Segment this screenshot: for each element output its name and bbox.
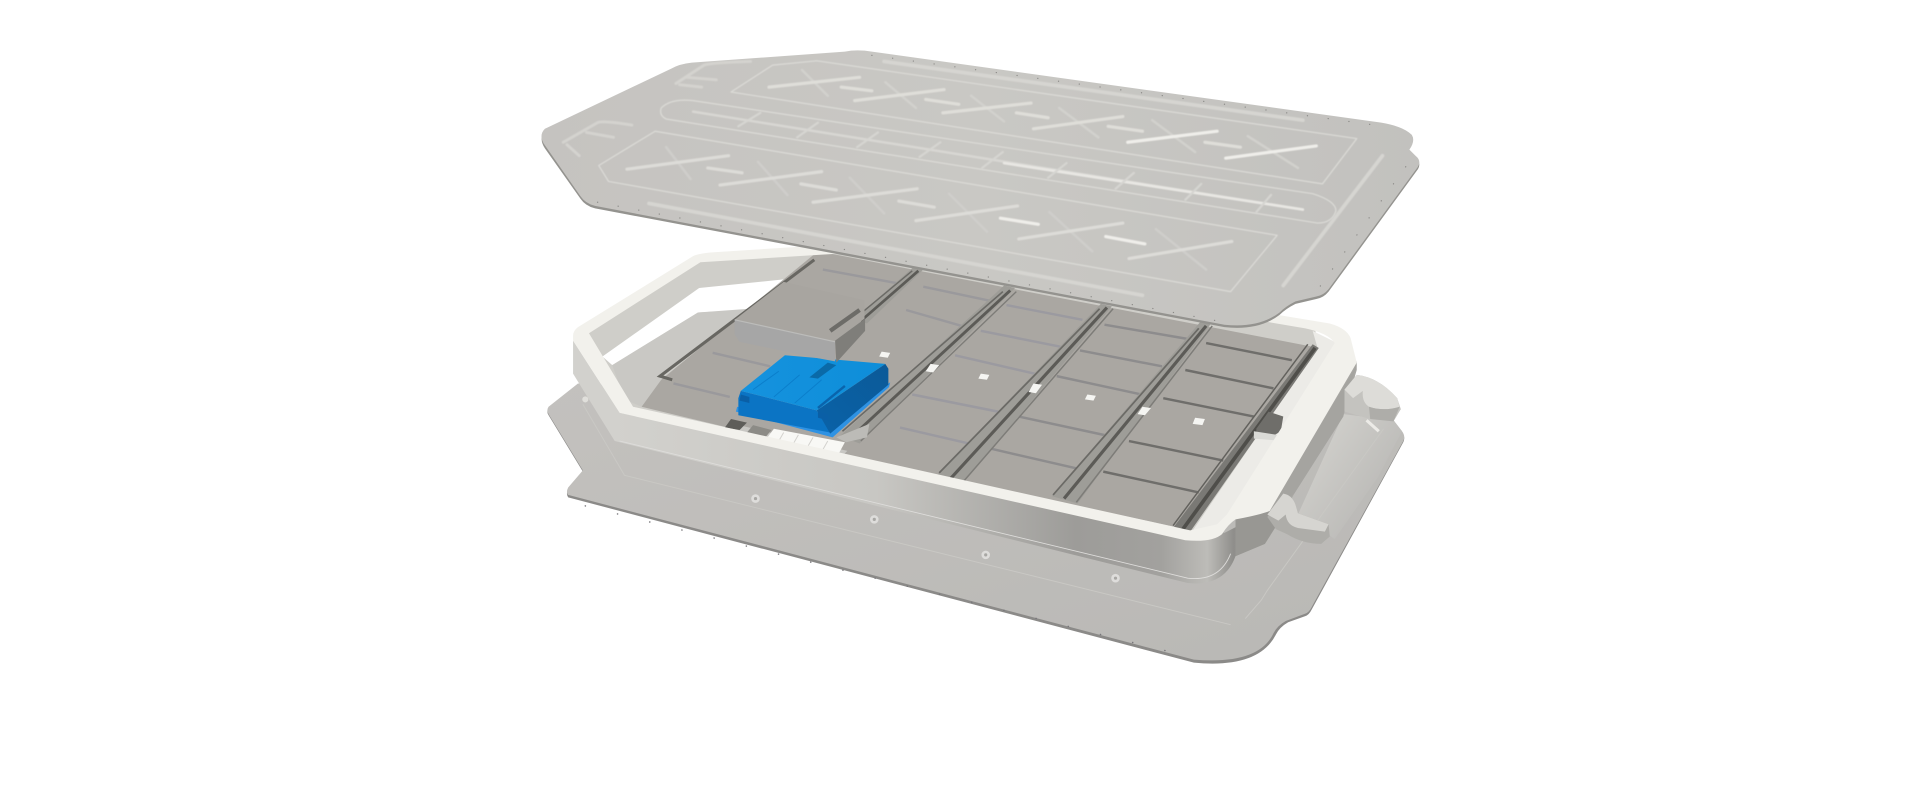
- blue top rib: [818, 386, 845, 408]
- lid edge shadow: [542, 135, 1419, 328]
- divider 4: [1052, 322, 1211, 503]
- tray rim: [573, 244, 1357, 541]
- lid lower panel x-ribs: [627, 147, 1232, 270]
- right side floor: [1190, 331, 1337, 534]
- wall right side: [1270, 365, 1357, 510]
- tray wall: outer surface: [573, 341, 1357, 583]
- lid corner ribs: [563, 61, 751, 156]
- wall lower seam: [620, 441, 1231, 579]
- blue top face: [741, 355, 885, 410]
- base plate: [547, 383, 1404, 664]
- wall corner recess: [1236, 510, 1280, 556]
- screw: far right: [1111, 574, 1120, 582]
- divider 3: [937, 304, 1112, 483]
- lid top panel x-ribs: [769, 70, 1316, 168]
- right connector block: [1254, 412, 1286, 441]
- blue right face: [817, 364, 888, 434]
- blue front face: [738, 391, 830, 432]
- screw: front right: [981, 551, 990, 559]
- blue base plate: [736, 382, 890, 437]
- divider 2: [840, 286, 1015, 443]
- lid rivet dots: [598, 55, 1406, 322]
- module channel dividers: [840, 267, 1319, 532]
- base plate right lit area: [1298, 414, 1402, 539]
- screw: front mid: [870, 515, 879, 524]
- mounting bracket: upper: [1344, 375, 1401, 421]
- lid panel outlines: [599, 61, 1357, 292]
- front cutout strip: [725, 419, 869, 456]
- screw: front left: [751, 494, 760, 503]
- blue top slot: [809, 363, 836, 379]
- divider 1: [855, 267, 923, 323]
- lid long ribs: [649, 61, 1382, 295]
- base plate rivet dots: [585, 506, 1194, 658]
- module floor: [642, 251, 1319, 532]
- row separators: [673, 270, 1292, 492]
- grey top face: [735, 282, 864, 341]
- inner wall: [584, 250, 1320, 534]
- left rail: [660, 260, 814, 380]
- lid middle channel rib: [693, 112, 1303, 212]
- lid plate: [541, 50, 1419, 325]
- grey left face: [735, 320, 835, 361]
- mounting bracket: lower: [1267, 494, 1330, 544]
- tray interior: [584, 250, 1337, 534]
- inner flange: [612, 309, 749, 407]
- lid: [541, 50, 1419, 328]
- white notches: [879, 352, 1205, 425]
- white gap strip: [602, 276, 809, 365]
- grey right face: [835, 319, 865, 363]
- blue corner bolts: [740, 394, 828, 420]
- grey battery module: [735, 282, 865, 363]
- blue battery module: [736, 355, 890, 437]
- base plate stamped lines: [583, 404, 1384, 625]
- right wall channel: [1173, 344, 1319, 532]
